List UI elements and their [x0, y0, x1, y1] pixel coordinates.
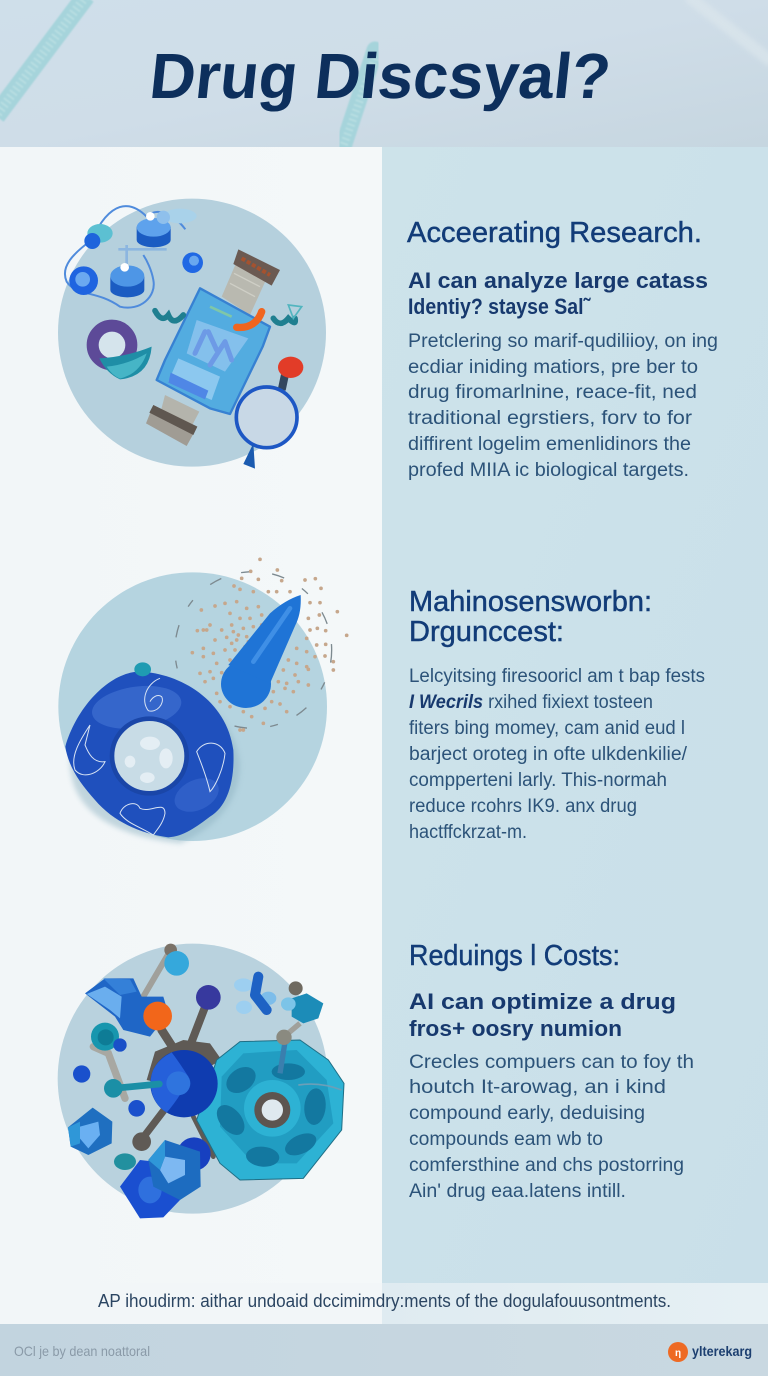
body text: drug firomarlnine, reace-fit, ned — [408, 382, 697, 403]
body text: fiters bing momey, cam anid eud l — [409, 718, 685, 739]
body text: hactffckrzat-m. — [409, 822, 527, 843]
icon: grey connectors — [93, 950, 222, 1157]
body text: profed MIIA ic biological targets. — [408, 460, 689, 481]
footer credit: OCl je by dean noattoral — [14, 1343, 150, 1359]
subheading: AI can analyze large catass — [408, 268, 708, 293]
body text: reduce rcohrs IK9. anx drug — [409, 796, 637, 817]
icon: butterfly molecule — [234, 977, 276, 1014]
icon: particle cloud — [192, 559, 347, 730]
icon: molecule network — [65, 206, 203, 308]
heading: reducing costs: Reduings l Costs: — [409, 940, 620, 972]
icon: dashed orbit — [175, 572, 332, 728]
illustration: reducing costs — [58, 944, 344, 1218]
logo: η — [675, 1348, 681, 1359]
heading: machine learning: Mahinosensworbn: — [409, 586, 652, 618]
body text: houtch It-arowag, an i kind — [409, 1077, 666, 1098]
icon: teal chain links — [155, 305, 302, 323]
heading: machine learning — [409, 586, 652, 648]
icon: blue ring dish — [65, 662, 240, 843]
body text: traditional egrstiers, forv to for — [408, 408, 693, 429]
caption text: AP ihoudirm: aithar undoaid dccimimdry:ments of the dogulafouusontments. — [98, 1291, 671, 1311]
section 1 text — [407, 217, 718, 481]
body text: comfersthine and chs postorring — [409, 1155, 684, 1176]
panel: caption strip — [0, 1283, 768, 1324]
subheading: Identiy? stayse Sal˜ — [408, 294, 591, 319]
icon: ring and bowl — [93, 326, 152, 379]
panel: footer — [0, 1324, 768, 1376]
body text: Ain' drug eaa.latens intill. — [409, 1181, 626, 1202]
decorative strand centre — [343, 50, 375, 147]
section 2 text — [409, 586, 705, 843]
subheading — [408, 268, 708, 319]
icon: device capsule — [146, 249, 280, 446]
heading: machine learning: Drgunccest: — [409, 616, 564, 648]
body text: Crecles compuers can to foy th — [409, 1052, 694, 1073]
decorative strand left — [0, 0, 86, 116]
section 3 text — [409, 940, 694, 1202]
illustration: accelerating research — [58, 199, 326, 469]
icon: teal cage molecule — [197, 1040, 344, 1180]
icon: central blue atom — [150, 1050, 218, 1117]
panel: right text column — [382, 147, 768, 1283]
icon: right stick and crystal — [276, 981, 323, 1073]
icon: large blue crystal — [85, 978, 168, 1037]
body text — [409, 1052, 694, 1202]
body text: compounds eam wb to — [409, 1129, 603, 1150]
icon: orange atom — [143, 1002, 172, 1030]
panel: left illustrations column — [0, 147, 382, 1283]
panel: header banner — [0, 0, 768, 147]
body text: ecdiar iniding matiors, pre ber to — [408, 357, 698, 378]
decorative light streak right — [688, 0, 768, 62]
body text: compound early, deduising — [409, 1103, 645, 1124]
title: Drug Discsyal? — [147, 40, 614, 112]
logo — [668, 1342, 752, 1362]
body text: compperteni larly. This-normah — [409, 770, 667, 791]
heading: accelerating research: Acceerating Research. — [407, 217, 702, 249]
icon: teal ring atom — [91, 1023, 127, 1052]
body text: I Wecrils rxihed fixiext tosteen — [409, 692, 653, 713]
body text: barject oroteg in ofte ulkdenkilie/ — [409, 744, 688, 765]
icon: left hexagon crystal — [68, 1108, 112, 1155]
icon: blue pestle — [221, 595, 301, 708]
icon: lower crystals — [114, 1132, 211, 1218]
illustration: machine learning — [58, 559, 347, 843]
body text — [409, 666, 705, 843]
subheading: fros+ oosry numion — [409, 1016, 622, 1041]
body text — [408, 331, 718, 481]
body text: diffirent logelim emenlidinors the — [408, 434, 691, 455]
icon: small blue balls — [73, 1065, 145, 1117]
icon: teal pin — [104, 1079, 159, 1098]
icon: magnifying glass — [236, 357, 303, 469]
body text: Pretclering so marif-qudiliioy, on ing — [408, 331, 718, 352]
body text: Lelcyitsing firesooricl am t bap fests — [409, 666, 705, 687]
icon: top atoms — [164, 944, 221, 1010]
subheading: AI can optimize a drug — [409, 989, 676, 1014]
logo: ylterekarg — [692, 1343, 752, 1359]
subheading — [409, 989, 676, 1041]
